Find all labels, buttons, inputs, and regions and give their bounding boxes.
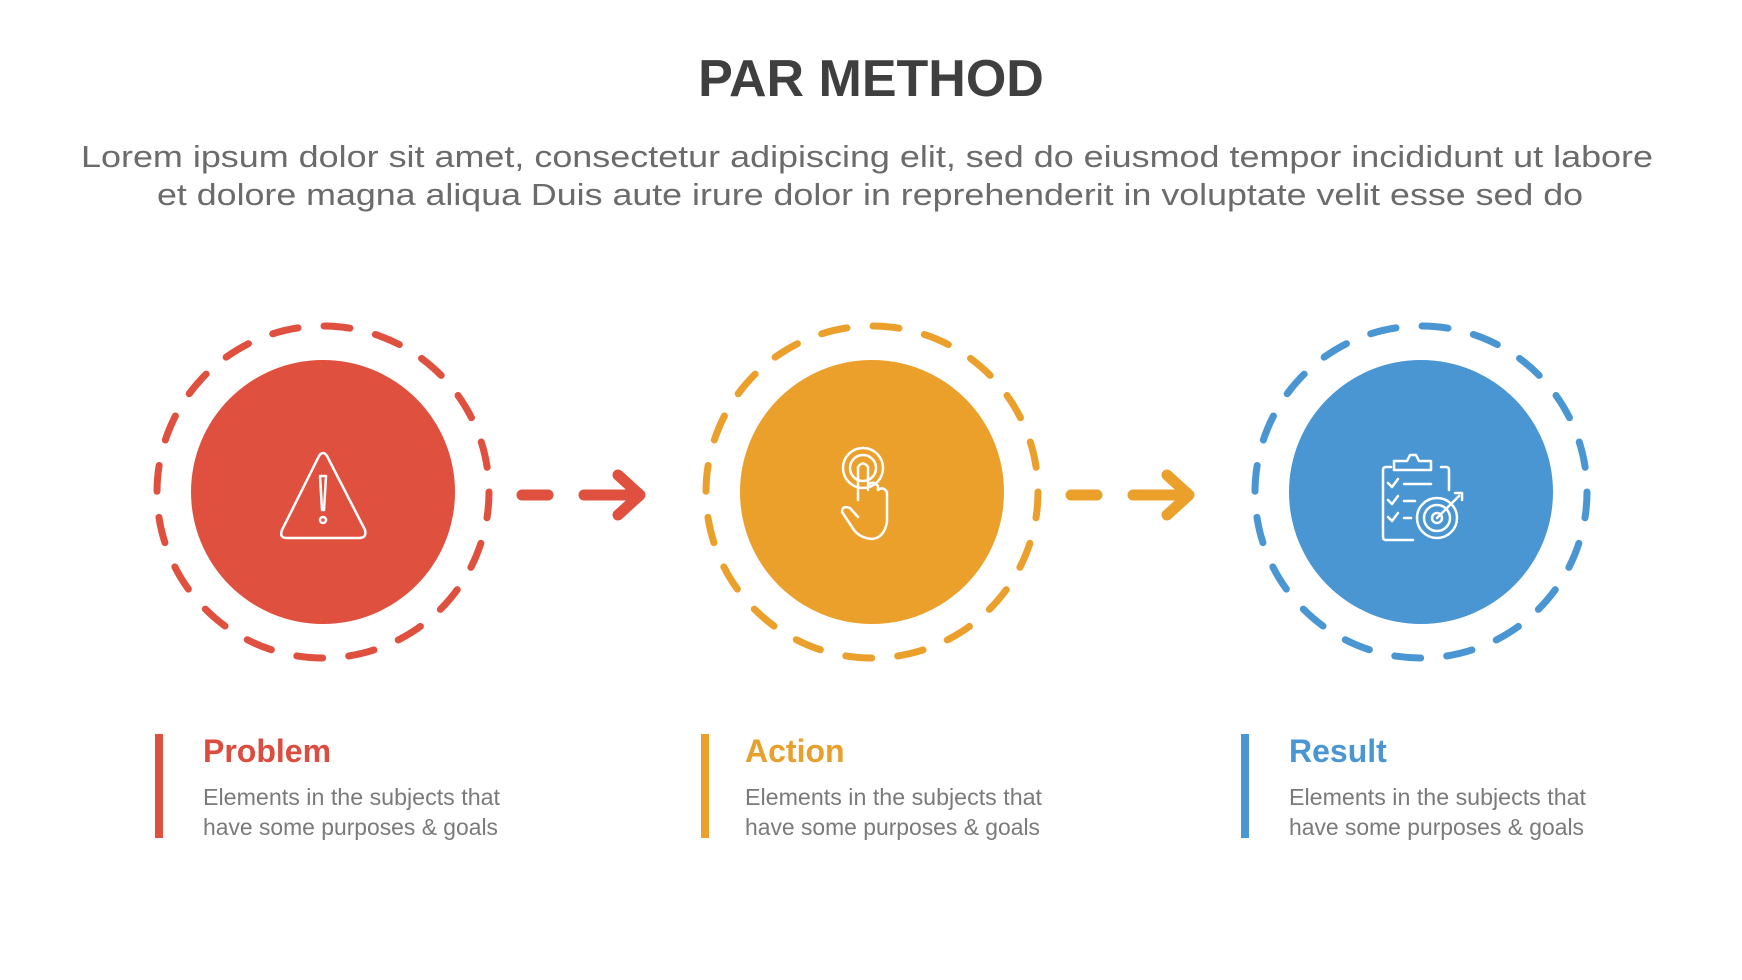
- subtitle: [81, 139, 1653, 212]
- arrow 2: [1071, 475, 1189, 515]
- text block: problem: have some purposes & goals: [203, 814, 498, 840]
- step 2: action circle: [706, 326, 1038, 658]
- icon: warning: [281, 453, 365, 538]
- text block: result: [1241, 733, 1587, 840]
- text block: action: [701, 733, 1043, 840]
- text block: result: have some purposes & goals: [1289, 814, 1584, 840]
- subtitle: Lorem ipsum dolor sit amet, consectetur adipiscing elit, sed do eiusmod tempor incididunt ut labore: [81, 139, 1653, 174]
- text block: result: Result: [1289, 733, 1387, 769]
- text block: action: have some purposes & goals: [745, 814, 1040, 840]
- step 3: result circle: [1255, 326, 1587, 658]
- title: PAR METHOD: [698, 50, 1044, 108]
- text block: problem: [155, 733, 501, 840]
- step 1: problem circle: [157, 326, 489, 658]
- icon: touch hand: [842, 448, 887, 539]
- arrow 1: [522, 475, 640, 515]
- subtitle: et dolore magna aliqua Duis aute irure dolor in reprehenderit in voluptate velit esse sed do: [157, 177, 1583, 212]
- icon: clipboard target: [1383, 455, 1462, 540]
- text block: action: Elements in the subjects that: [745, 784, 1043, 810]
- text block: problem: Problem: [203, 733, 331, 769]
- text block: problem: Elements in the subjects that: [203, 784, 501, 810]
- text block: result: Elements in the subjects that: [1289, 784, 1587, 810]
- text block: action: Action: [745, 733, 845, 769]
